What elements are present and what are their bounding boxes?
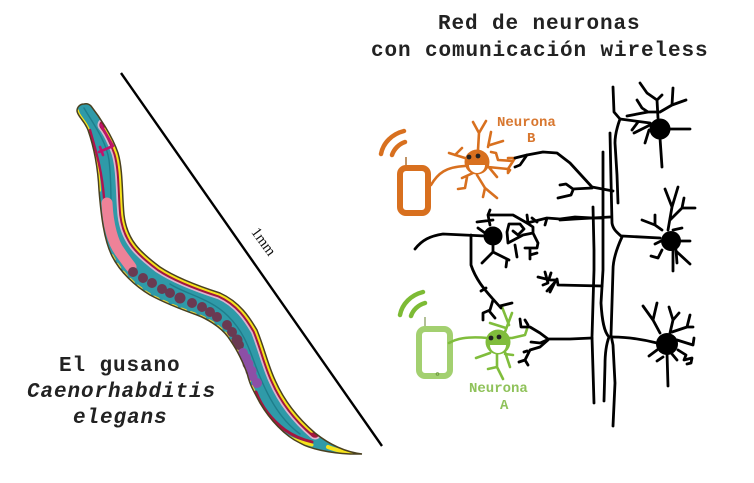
small dendrite [538, 272, 602, 292]
neuron B in orange [431, 121, 515, 198]
worm caption: El gusano [59, 355, 181, 378]
worm: central canal [84, 108, 300, 434]
worm: dorsal bands [104, 125, 315, 433]
worm: purple eggs [238, 348, 262, 388]
horizontal link to neuron 1 column [560, 217, 610, 220]
worm caption [27, 355, 216, 430]
vertical axon bundle [592, 87, 622, 426]
label: neurona B: Neurona [497, 115, 556, 131]
icon: orange phone [400, 157, 428, 213]
label: neurona A: A [500, 398, 509, 414]
icon: green wifi waves [400, 292, 425, 316]
label: neurona B [497, 115, 556, 147]
label: neurona B: B [527, 131, 536, 147]
neuron 3 bottom right [613, 303, 694, 386]
label: neurona A: Neurona [469, 381, 528, 397]
icon: green phone [419, 317, 450, 376]
scale label: 1mm [247, 225, 279, 259]
worm caption: Caenorhabditis [27, 381, 216, 404]
title [371, 13, 709, 63]
neuron 1 top right [620, 83, 690, 167]
neuron B axon terminal [515, 152, 613, 198]
worm [77, 104, 362, 454]
icon: orange wifi waves [381, 131, 405, 155]
worm: ventral bands [77, 111, 352, 453]
label: neurona A [469, 381, 528, 414]
neuron A in green [449, 307, 527, 379]
worm: intestine [107, 203, 131, 267]
axon to neuron A terminal [519, 319, 592, 365]
scale bar line [121, 73, 382, 446]
neuron 2 middle right [622, 187, 695, 271]
worm caption: elegans [73, 407, 168, 430]
worm: maroon eggs [128, 267, 244, 350]
worm: pharynx mark [99, 125, 113, 155]
title: Red de neuronas [438, 13, 641, 36]
neuron B soma [464, 150, 490, 174]
title: con comunicación wireless [371, 40, 709, 63]
neuron A soma [486, 330, 510, 354]
central neuron [415, 210, 603, 320]
